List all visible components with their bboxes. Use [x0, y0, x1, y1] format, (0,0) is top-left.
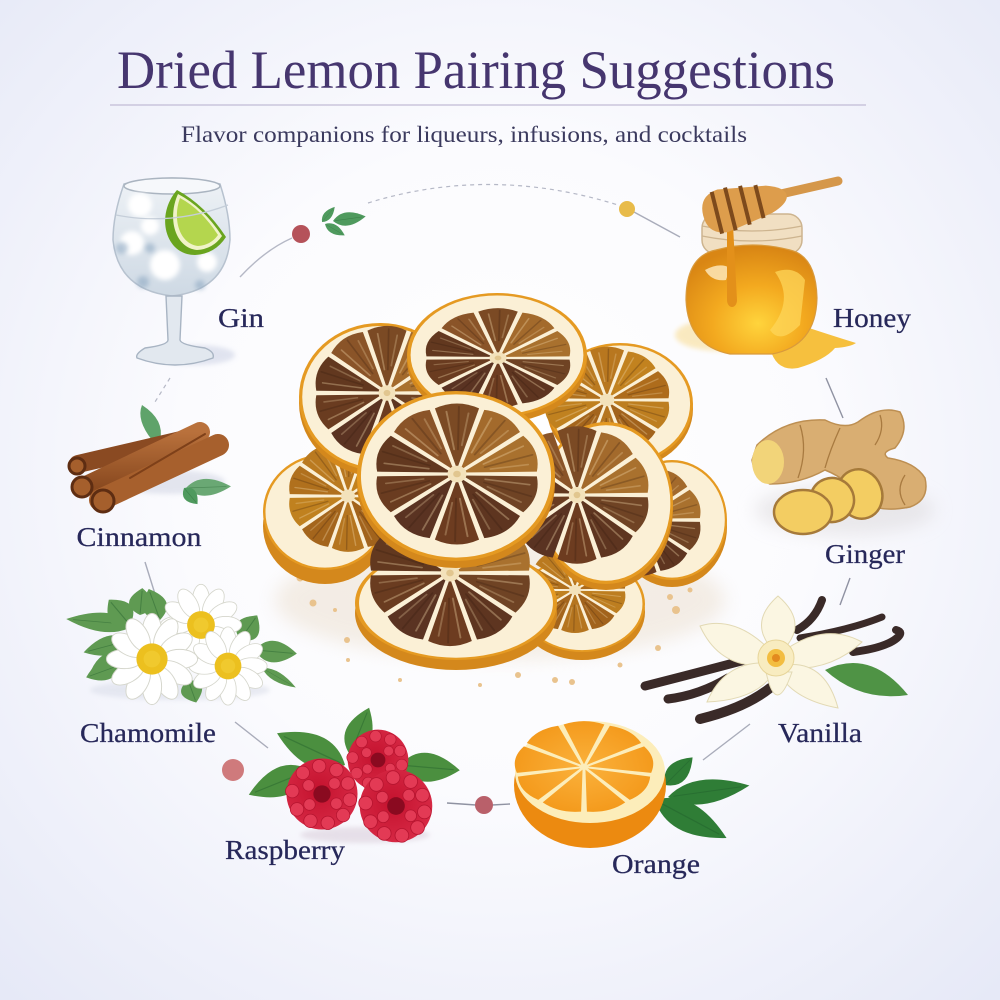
slice: bottom right — [519, 547, 645, 660]
vanilla beans — [645, 600, 900, 719]
ice — [120, 193, 217, 280]
petals — [700, 596, 862, 708]
lime wedge — [165, 190, 226, 255]
label: ginger: Ginger — [825, 539, 905, 569]
slice: bottom — [355, 500, 557, 670]
label: vanilla: Vanilla — [778, 718, 862, 748]
label: orange: Orange — [612, 849, 700, 879]
item: orange — [512, 721, 751, 851]
title: Dried Lemon Pairing Suggestions — [117, 40, 835, 100]
label: gin: Gin — [218, 303, 265, 333]
glass bowl — [113, 178, 230, 296]
label: honey: Honey — [833, 303, 912, 333]
slice: left top — [299, 323, 463, 477]
slice: back right — [576, 460, 727, 587]
ginger slices — [774, 463, 889, 534]
item: honey — [675, 174, 856, 369]
slice: center front — [357, 391, 555, 568]
central pile of dried lemon slices — [263, 293, 727, 687]
crumbs — [296, 574, 692, 687]
jar neck — [702, 214, 802, 254]
jar body — [686, 245, 817, 354]
label: chamomile: Chamomile — [80, 718, 216, 748]
item: chamomile — [65, 584, 298, 706]
item: raspberry — [243, 703, 461, 843]
subtitle: Flavor companions for liqueurs, infusions, and cocktails — [181, 122, 747, 147]
stem and foot — [137, 296, 213, 365]
item: ginger — [752, 410, 935, 535]
item: gin — [113, 178, 235, 365]
slice: middle right — [501, 422, 673, 590]
slice: top — [407, 293, 587, 423]
item: vanilla — [645, 596, 908, 719]
cinnamon leaves — [140, 405, 161, 440]
connectors: lines, arc and dots — [145, 184, 850, 814]
honey drip — [727, 225, 737, 307]
label: cinnamon: Cinnamon — [76, 522, 202, 552]
item: cinnamon — [69, 405, 231, 512]
slice: left lower — [263, 440, 410, 584]
slice: right top — [541, 343, 693, 470]
dipper — [772, 181, 838, 196]
label: raspberry: Raspberry — [225, 835, 346, 865]
